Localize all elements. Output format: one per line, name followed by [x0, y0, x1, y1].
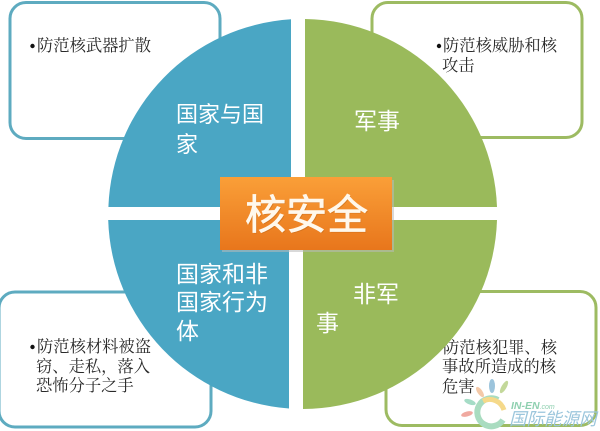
panel: top-left box — [10, 2, 220, 138]
text: nuclear material theft: 窃、走私，落入 — [36, 353, 150, 377]
logo text: China energy network: 国际能源网 — [509, 409, 599, 429]
panel: top-right box — [372, 2, 582, 138]
text: nuclear threat and attack: 攻击 — [442, 52, 475, 76]
quadrant: military — [305, 19, 497, 207]
text: nuclear material theft: 防范核材料被盗 — [37, 333, 151, 357]
text: nuclear crime and accidents: 事故所造成的核 — [442, 353, 557, 377]
label: state to state: 国家与国 — [176, 102, 264, 127]
center title: 核安全 — [245, 192, 368, 238]
label: non-military: 非军 — [353, 281, 399, 307]
text: nuclear weapons proliferation: 防范核武器扩散 — [37, 32, 151, 56]
label: non-military: 事 — [316, 310, 339, 336]
panel: bottom-right box — [386, 292, 596, 426]
label: state and non-state actors: 国家行为 — [176, 289, 268, 315]
text: nuclear crime and accidents: 防范核犯罪、核 — [443, 334, 557, 358]
label: state and non-state actors: 国家和非 — [176, 261, 268, 287]
text: nuclear crime and accidents: 危害 — [442, 373, 475, 397]
text: nuclear material theft: 恐怖分子之手 — [36, 372, 134, 396]
logo icon: sun — [461, 379, 510, 426]
panel: bottom-left box — [0, 292, 211, 427]
label: state and non-state actors: 体 — [176, 318, 199, 344]
label: state to state: 家 — [176, 132, 198, 157]
label: military: 军事 — [354, 108, 400, 134]
quadrant: non-military — [303, 220, 497, 409]
watermark logo — [461, 379, 599, 429]
quadrant: state to state — [108, 19, 291, 207]
center title box: 核安全 — [246, 193, 369, 239]
logo text: IN-EN.com: IN-EN.com — [511, 400, 555, 412]
quadrant: state and non-state actors — [108, 220, 289, 408]
center title box — [220, 177, 394, 252]
text: nuclear threat and attack: 防范核威胁和核 — [443, 32, 557, 56]
